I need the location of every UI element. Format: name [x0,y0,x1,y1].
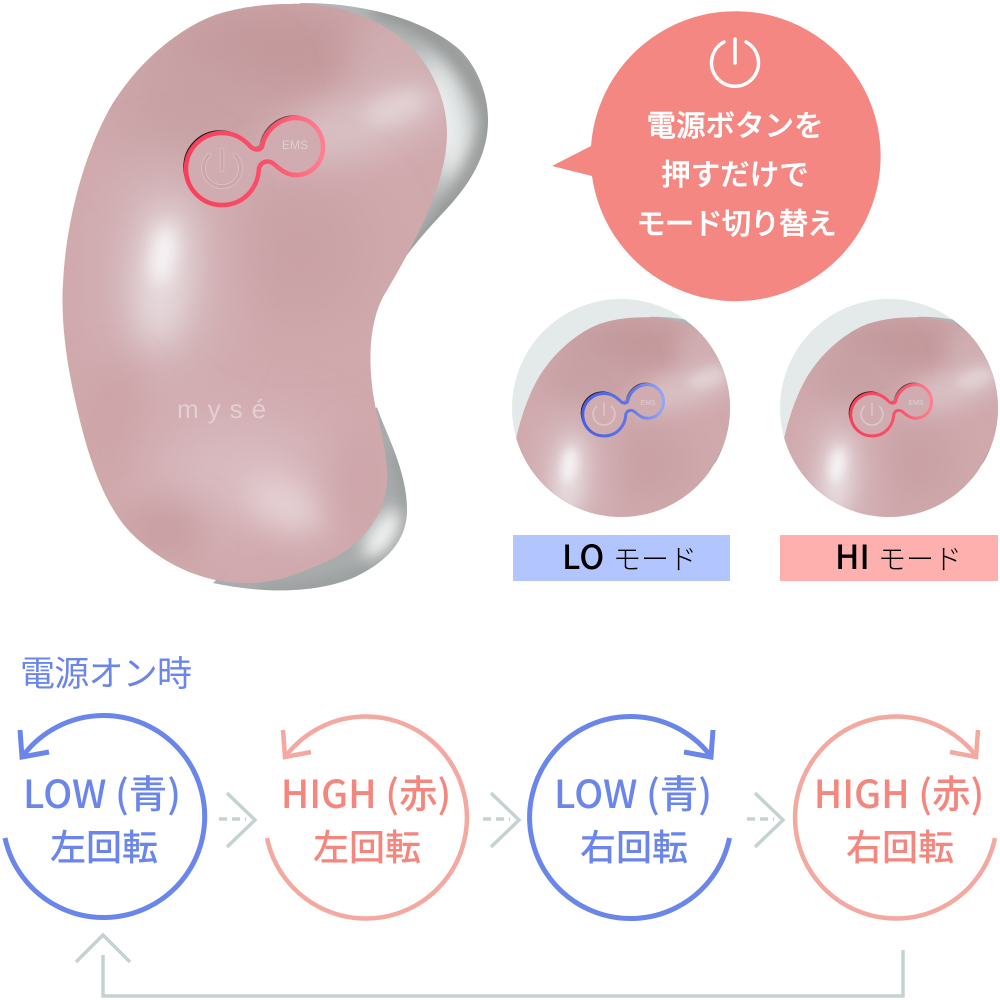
closeup circle [780,299,998,517]
step 4: HIGH red right rotation [795,717,995,919]
arrow: step 1 to 2 [219,793,255,847]
step label: HIGH (赤) [281,764,451,820]
step label: 右回転 [580,819,688,871]
power and EMS button ring [184,116,323,205]
callout text: 押すだけで [661,152,809,194]
arrow: step 2 to 3 [483,793,519,847]
icon: power [712,39,758,86]
HI label text: HI [835,531,870,579]
LO label text: モード [613,538,697,578]
LO label bar [513,535,730,581]
closeup circle [512,299,730,517]
step 3: LOW blue right rotation [530,717,730,919]
step label: 左回転 [313,819,421,871]
device back: upper gray head [290,0,500,290]
product: myse device [40,0,500,610]
step label: 右回転 [846,819,954,871]
callout text: 電源ボタンを [646,103,824,145]
step label: 左回転 [50,819,158,871]
brand logo: mysé [177,394,275,424]
LO mode closeup [512,299,730,581]
rotation arrow [5,716,205,918]
step label: HIGH (赤) [814,764,984,820]
arrow: loop back to step 1 [76,935,903,996]
HI mode closeup [780,299,998,581]
EMS label: EMS [282,138,308,152]
step label: LOW (青) [554,764,712,820]
heading: power on: 電源オン時 [20,646,192,697]
rotation arrow [795,717,995,919]
rotation arrow [267,717,467,919]
HI label bar [780,535,998,581]
arrow: step 3 to 4 [747,793,783,847]
step 1: LOW blue left rotation [5,716,205,918]
callout text: モード切り替え [636,201,836,243]
step label: LOW (青) [23,764,181,820]
icon: power symbol on button [203,150,240,187]
step 2: HIGH red left rotation [267,717,467,919]
EMS label LO: EMS [640,400,656,407]
device body [62,4,447,583]
rotation arrow [530,717,730,919]
HI label text: モード [878,538,962,578]
EMS label HI: EMS [908,400,924,407]
LO label text: LO [562,531,604,579]
callout: power button speech bubble [552,11,881,301]
device back: lower gray head [200,400,420,600]
